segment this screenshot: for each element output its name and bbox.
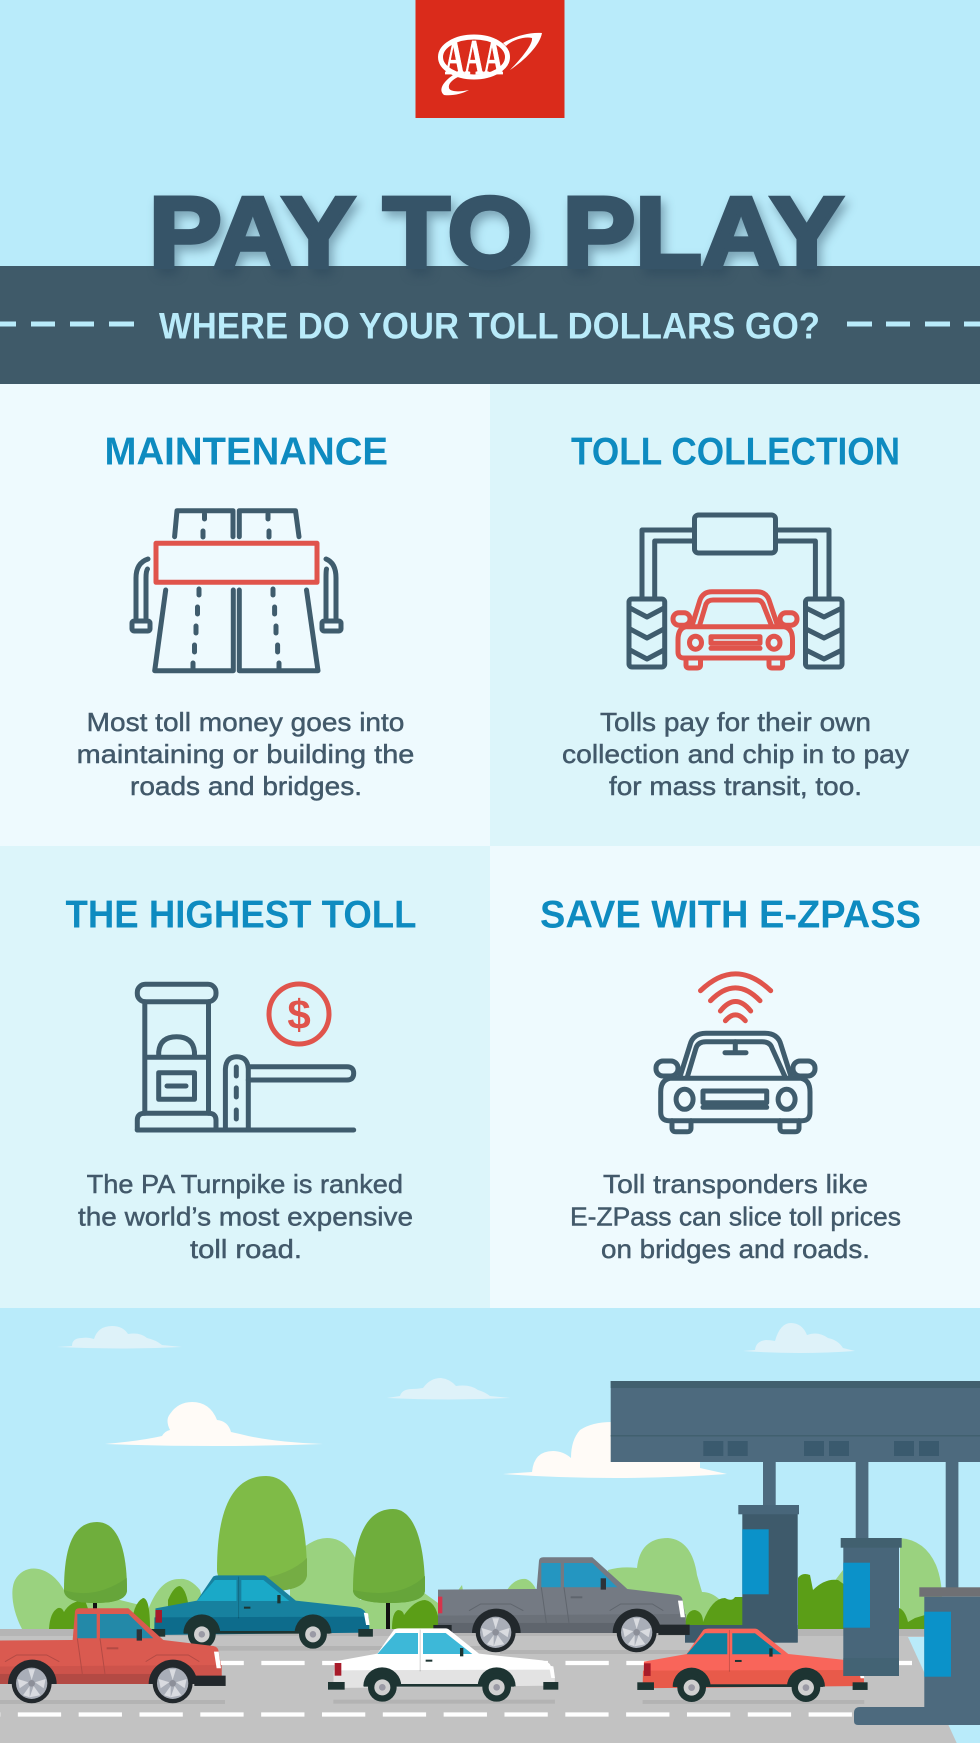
subtitle: WHERE DO YOUR TOLL DOLLARS GO? bbox=[159, 306, 820, 346]
heading: the highest toll: THE HIGHEST TOLL bbox=[66, 894, 416, 937]
car: gray pickup bbox=[433, 1557, 690, 1652]
text: maintenance: maintaining or building the bbox=[77, 739, 414, 769]
AAA logo: AAA bbox=[445, 29, 503, 85]
text: the highest toll: The PA Turnpike is ranked bbox=[87, 1169, 403, 1199]
text: maintenance: Most toll money goes into bbox=[87, 707, 404, 737]
panel: toll collection bbox=[490, 384, 980, 846]
toll booth three and base bbox=[854, 1587, 980, 1725]
illustration: toll plaza scene bbox=[0, 1323, 980, 1743]
toll booth one bbox=[685, 1505, 799, 1643]
car: red pickup bbox=[0, 1608, 226, 1703]
car: blue sedan bbox=[149, 1575, 373, 1651]
text: save with e-zpass: Toll transponders like bbox=[603, 1169, 868, 1199]
panel: maintenance bbox=[0, 384, 490, 846]
text: save with e-zpass: on bridges and roads. bbox=[601, 1234, 870, 1264]
icon: highway with sign bbox=[132, 511, 341, 671]
text: the highest toll: toll road. bbox=[190, 1234, 302, 1264]
text: toll collection: Tolls pay for their own bbox=[600, 707, 871, 737]
tree centre bbox=[217, 1476, 307, 1591]
text: the highest toll: the world’s most expensive bbox=[78, 1202, 413, 1232]
text: toll collection bbox=[562, 707, 909, 801]
road bbox=[0, 1629, 980, 1743]
icon: dollar coin bbox=[269, 984, 329, 1044]
text: save with e-zpass: E-ZPass can slice toll prices bbox=[570, 1202, 901, 1232]
icon: dollar coin: $ bbox=[287, 991, 311, 1038]
text: save with e-zpass bbox=[570, 1169, 901, 1264]
panel: save with e-zpass bbox=[490, 846, 980, 1308]
tree left bbox=[64, 1522, 127, 1612]
icon: toll booth and barrier bbox=[137, 984, 354, 1130]
AAA logo bbox=[416, 0, 564, 118]
panel: the highest toll bbox=[0, 846, 490, 1308]
car: red sedan bbox=[637, 1629, 868, 1704]
heading: toll collection: TOLL COLLECTION bbox=[571, 430, 900, 474]
icon: car with wifi signal bbox=[656, 974, 815, 1132]
text: maintenance: roads and bridges. bbox=[130, 771, 362, 801]
car: white sedan bbox=[328, 1628, 558, 1704]
text: the highest toll bbox=[78, 1169, 413, 1264]
dark green bushes bbox=[49, 1574, 925, 1629]
text: maintenance bbox=[77, 707, 414, 801]
toll plaza canopy bbox=[611, 1381, 980, 1590]
road dashes right bbox=[847, 322, 980, 326]
icon: toll gantry and car bbox=[629, 515, 842, 668]
tree right bbox=[353, 1509, 425, 1629]
title banner band bbox=[0, 266, 980, 384]
text: toll collection: collection and chip in to pay bbox=[562, 739, 909, 769]
heading: save with e-zpass: SAVE WITH E-ZPASS bbox=[540, 894, 921, 937]
toll booth two bbox=[841, 1538, 902, 1676]
light green bushes bbox=[12, 1538, 942, 1629]
text: toll collection: for mass transit, too. bbox=[609, 771, 862, 801]
title: PAY TO PLAY bbox=[149, 177, 843, 289]
road dashes left bbox=[0, 322, 134, 326]
heading: maintenance: MAINTENANCE bbox=[104, 430, 388, 474]
clouds bbox=[57, 1323, 855, 1478]
